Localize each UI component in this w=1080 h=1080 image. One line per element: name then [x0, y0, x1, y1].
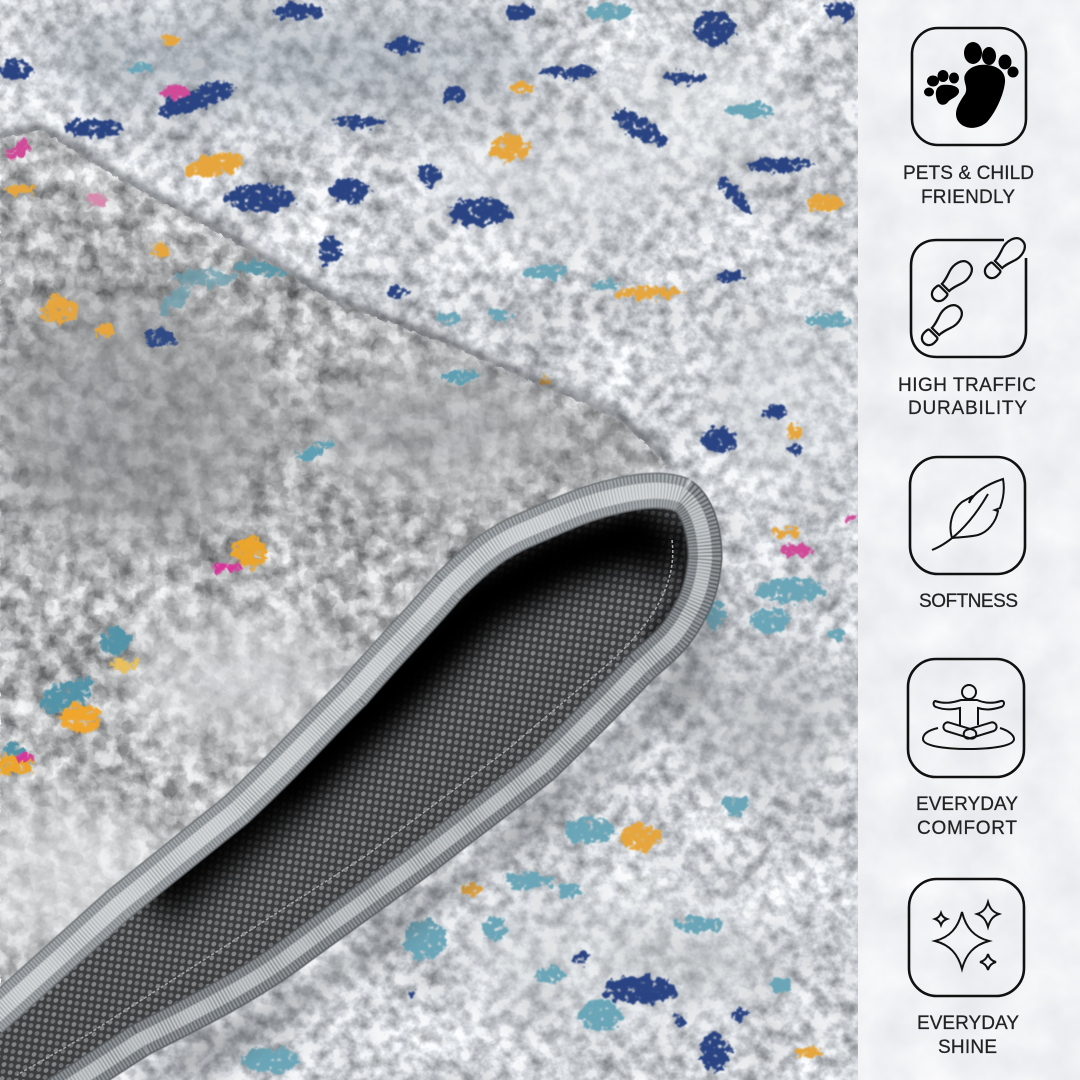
label	[903, 163, 1034, 208]
label: FRIENDLY	[921, 187, 1015, 208]
feature: high traffic durability	[898, 234, 1036, 419]
label	[916, 794, 1018, 839]
shadow under rug fold	[130, 560, 720, 1080]
label: PETS & CHILD	[903, 163, 1034, 184]
label: SOFTNESS	[919, 591, 1018, 612]
label: DURABILITY	[908, 398, 1027, 419]
icon: footprints	[911, 234, 1029, 357]
feature panel background	[858, 0, 1080, 1080]
floor pattern splashes	[0, 0, 856, 1072]
flap edge shadow	[0, 128, 670, 462]
feature: everyday comfort	[908, 659, 1024, 839]
stitched binding: upper curve	[0, 491, 682, 1020]
icon: paw and foot	[912, 28, 1026, 145]
stitched binding: lower curve	[55, 495, 705, 1080]
folded rug flap	[0, 120, 680, 1020]
label: COMFORT	[917, 818, 1017, 839]
label: HIGH TRAFFIC	[898, 375, 1036, 396]
feature: pets and child friendly	[903, 28, 1034, 208]
rug floor surface	[0, 0, 860, 1080]
flap pattern splashes	[0, 137, 480, 775]
icon: feather	[910, 457, 1025, 574]
label	[917, 1013, 1019, 1058]
icon: sparkles	[909, 879, 1024, 996]
feature: softness	[910, 457, 1025, 612]
label: EVERYDAY	[917, 1013, 1019, 1034]
feature: everyday shine	[909, 879, 1024, 1058]
label: EVERYDAY	[916, 794, 1018, 815]
rug underside backing	[0, 490, 720, 1080]
backing seam	[17, 540, 673, 1075]
label: SHINE	[938, 1037, 997, 1058]
label	[898, 375, 1036, 419]
icon: seated figure	[908, 659, 1024, 777]
rug photograph	[0, 0, 860, 1080]
